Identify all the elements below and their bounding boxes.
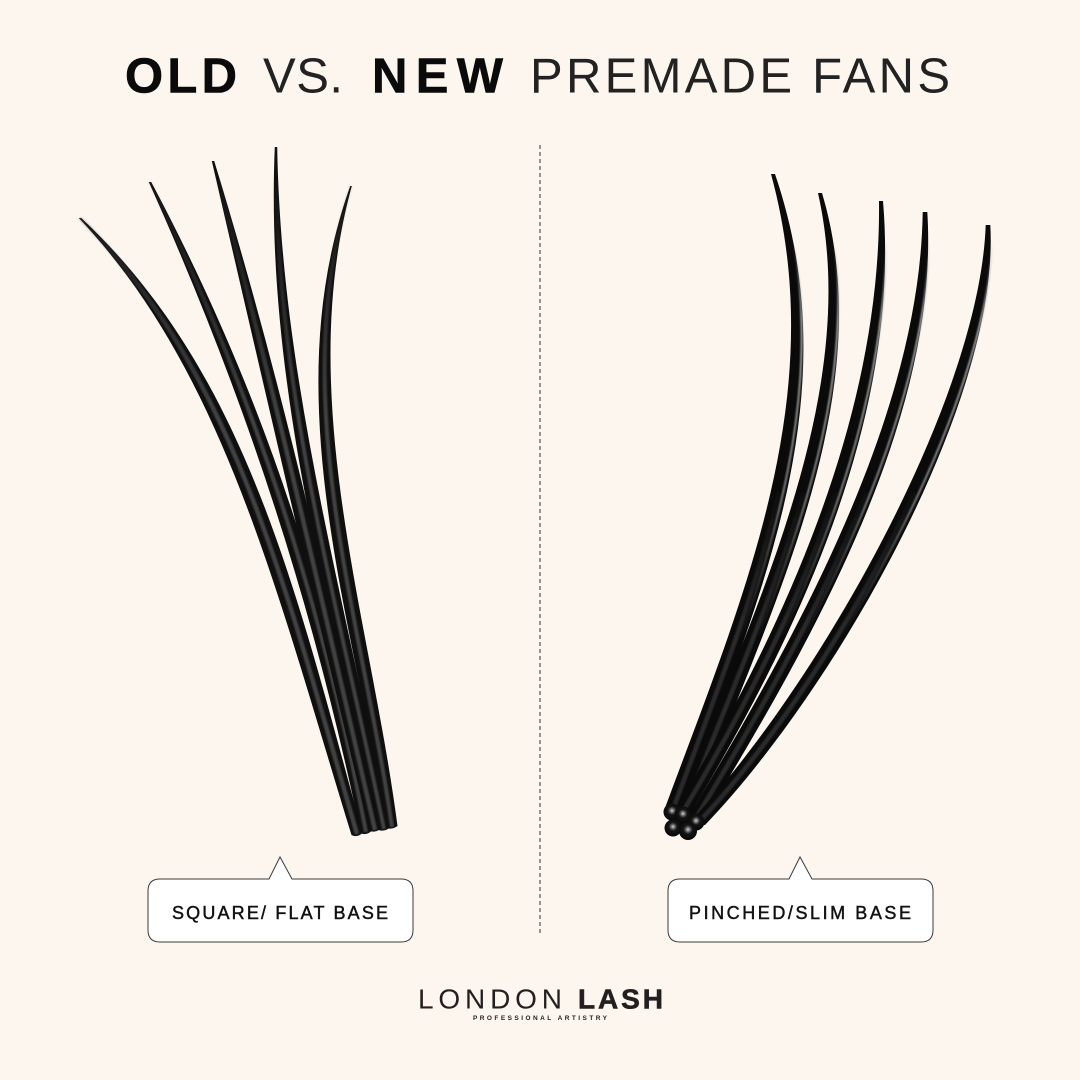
- brand logo: PROFESSIONAL ARTISTRY: [473, 1015, 608, 1022]
- title: PREMADE FANS: [530, 50, 950, 104]
- center dashed divider: [539, 145, 541, 935]
- lash 3: [664, 201, 886, 828]
- callout: square flat base: SQUARE/ FLAT BASE: [172, 903, 388, 923]
- lash 5: [318, 186, 398, 829]
- title: NEW: [372, 50, 504, 104]
- callout: square flat base: [148, 857, 413, 942]
- brand logo: LASH: [578, 984, 663, 1014]
- lash fan: new pinched slim base: [664, 174, 993, 840]
- lash 2: [149, 182, 372, 834]
- callout: pinched slim base: PINCHED/SLIM BASE: [689, 903, 911, 923]
- title: [125, 50, 950, 104]
- title: OLD: [125, 50, 237, 104]
- lash 1: [664, 174, 803, 812]
- lash 1: [79, 218, 363, 836]
- lash 3: [212, 161, 380, 832]
- brand logo: LONDON: [418, 984, 562, 1014]
- brand logo: [418, 984, 663, 1022]
- lash fan: old square flat base: [79, 147, 398, 836]
- lash 5: [687, 225, 993, 825]
- callout: pinched slim base: [668, 857, 933, 942]
- pinched base lash ends: [664, 804, 704, 840]
- title: VS.: [263, 50, 343, 104]
- lash 4: [274, 147, 390, 831]
- lash 2: [674, 193, 839, 815]
- lash 4: [680, 212, 930, 831]
